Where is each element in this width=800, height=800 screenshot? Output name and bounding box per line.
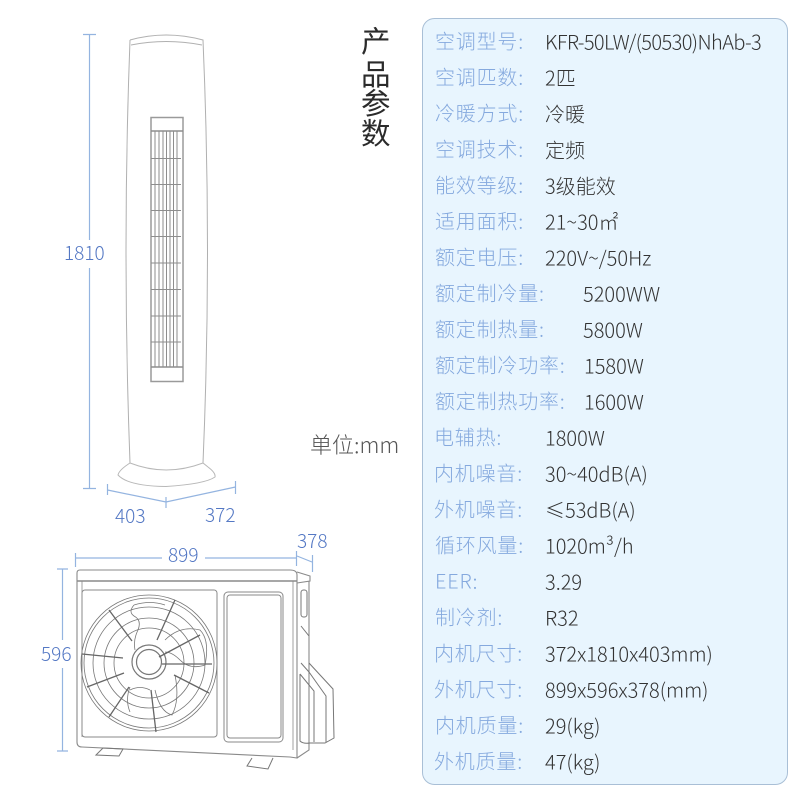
outdoor unit feet xyxy=(96,748,273,769)
row: EER: EER: xyxy=(435,566,478,594)
heading: product parameters: 参 xyxy=(361,81,391,123)
outdoor unit fan guard xyxy=(81,595,217,731)
heading: product parameters xyxy=(361,19,391,153)
row: horsepower: 2匹 xyxy=(545,62,576,92)
tower body outline xyxy=(126,35,208,463)
row: technology: 定频 xyxy=(545,134,585,164)
row: electric heating: 1800W xyxy=(545,422,605,452)
row: EER xyxy=(435,566,582,596)
dimension: outdoor depth 378: 378 xyxy=(297,527,328,554)
panel: specification table xyxy=(422,18,788,784)
row: EER: 3.29 xyxy=(545,566,582,596)
row: outdoor weight xyxy=(434,746,600,776)
row: outdoor weight: 外机质量: xyxy=(434,746,523,774)
row: model: KFR-50LW/(50530)NhAb-3 xyxy=(545,26,761,56)
row: energy class xyxy=(435,170,616,200)
row: technology xyxy=(435,134,585,164)
row: refrigerant xyxy=(435,602,579,632)
row: outdoor size: 外机尺寸: xyxy=(434,674,523,702)
row: mode xyxy=(435,98,585,128)
row: airflow xyxy=(435,530,634,560)
row: heating capacity: 5800W xyxy=(583,314,643,344)
row: voltage xyxy=(435,242,651,272)
dimension: indoor depth 403 and width 372: 403 xyxy=(115,502,146,529)
dimension: outdoor width 899: 899 xyxy=(168,541,198,568)
outdoor unit fan blades xyxy=(128,602,207,715)
indoor tower unit drawing xyxy=(118,35,215,486)
row: electric heating: 电辅热: xyxy=(434,422,502,450)
row: mode: 冷暖方式: xyxy=(435,98,524,126)
row: cooling capacity: 额定制冷量: xyxy=(435,278,545,306)
row: energy class: 3级能效 xyxy=(545,170,616,200)
row: indoor noise: 内机噪音: xyxy=(434,458,523,486)
row: outdoor noise xyxy=(434,494,636,524)
outdoor unit drawing xyxy=(77,570,334,769)
row: cooling capacity xyxy=(435,278,660,308)
row: voltage: 220V~/50Hz xyxy=(545,242,651,272)
row: voltage: 额定电压: xyxy=(435,242,524,270)
row: indoor weight: 29(kg) xyxy=(545,710,600,740)
dimension: outdoor height 596: 596 xyxy=(41,640,72,667)
outdoor unit fan guard spokes xyxy=(82,600,212,732)
row: heating capacity xyxy=(435,314,643,344)
row: indoor size: 372x1810x403mm) xyxy=(545,638,713,668)
row: outdoor noise: ≤53dB(A) xyxy=(545,494,636,524)
row: outdoor noise: 外机噪音: xyxy=(434,494,523,522)
row: area: 21~30㎡ xyxy=(545,206,618,236)
dimension: indoor depth 403 and width 372: 372 xyxy=(205,501,236,528)
row: area: 适用面积: xyxy=(435,206,524,234)
outdoor unit fan panel xyxy=(82,590,217,737)
row: heating power xyxy=(435,386,644,416)
row: refrigerant: R32 xyxy=(545,602,579,632)
row: indoor size: 内机尺寸: xyxy=(434,638,523,666)
row: indoor noise: 30~40dB(A) xyxy=(545,458,648,488)
panel background xyxy=(422,18,788,784)
row: indoor size xyxy=(434,638,713,668)
dimension: indoor height 1810: 1810 xyxy=(64,239,105,266)
row: electric heating xyxy=(434,422,605,452)
tower air outlet grille xyxy=(151,118,183,382)
row: indoor weight: 内机质量: xyxy=(435,710,524,738)
dimension: indoor depth 403 and width 372 xyxy=(108,481,236,529)
heading: product parameters: 产 xyxy=(361,19,391,61)
heading: product parameters: 数 xyxy=(361,111,391,153)
row: heating power: 额定制热功率: xyxy=(435,386,566,414)
row: cooling power xyxy=(435,350,644,380)
row: airflow: 1020m³/h xyxy=(545,530,634,560)
row: horsepower: 空调匹数: xyxy=(435,62,524,90)
row: mode: 冷暖 xyxy=(545,98,585,128)
row: outdoor size xyxy=(434,674,708,704)
outdoor unit pipe cover xyxy=(300,590,334,743)
outdoor unit casing xyxy=(77,570,310,758)
row: indoor weight xyxy=(435,710,600,740)
row: outdoor size: 899x596x378(mm) xyxy=(545,674,708,704)
row: airflow: 循环风量: xyxy=(435,530,524,558)
row: outdoor weight: 47(kg) xyxy=(545,746,600,776)
dimension: outdoor height 596 xyxy=(41,569,72,751)
row: cooling power: 1580W xyxy=(584,350,644,380)
row: heating capacity: 额定制热量: xyxy=(435,314,545,342)
dimension: outdoor depth 378 xyxy=(297,527,328,572)
heading: product parameters: 品 xyxy=(361,52,391,94)
row: area xyxy=(435,206,618,236)
row: indoor noise xyxy=(434,458,648,488)
row: heating power: 1600W xyxy=(584,386,644,416)
row: refrigerant: 制冷剂: xyxy=(435,602,503,630)
dimension: outdoor width 899 xyxy=(76,541,296,568)
dimension: indoor height 1810 xyxy=(64,34,105,488)
row: energy class: 能效等级: xyxy=(435,170,524,198)
row: model xyxy=(435,26,761,56)
row: horsepower xyxy=(435,62,576,92)
row: technology: 空调技术: xyxy=(435,134,524,162)
row: model: 空调型号: xyxy=(435,26,524,54)
unit note: 单位:mm xyxy=(310,428,399,460)
outdoor unit side panel xyxy=(224,592,283,742)
row: cooling power: 额定制冷功率: xyxy=(435,350,566,378)
tower base xyxy=(118,463,215,486)
row: cooling capacity: 5200WW xyxy=(583,278,660,308)
